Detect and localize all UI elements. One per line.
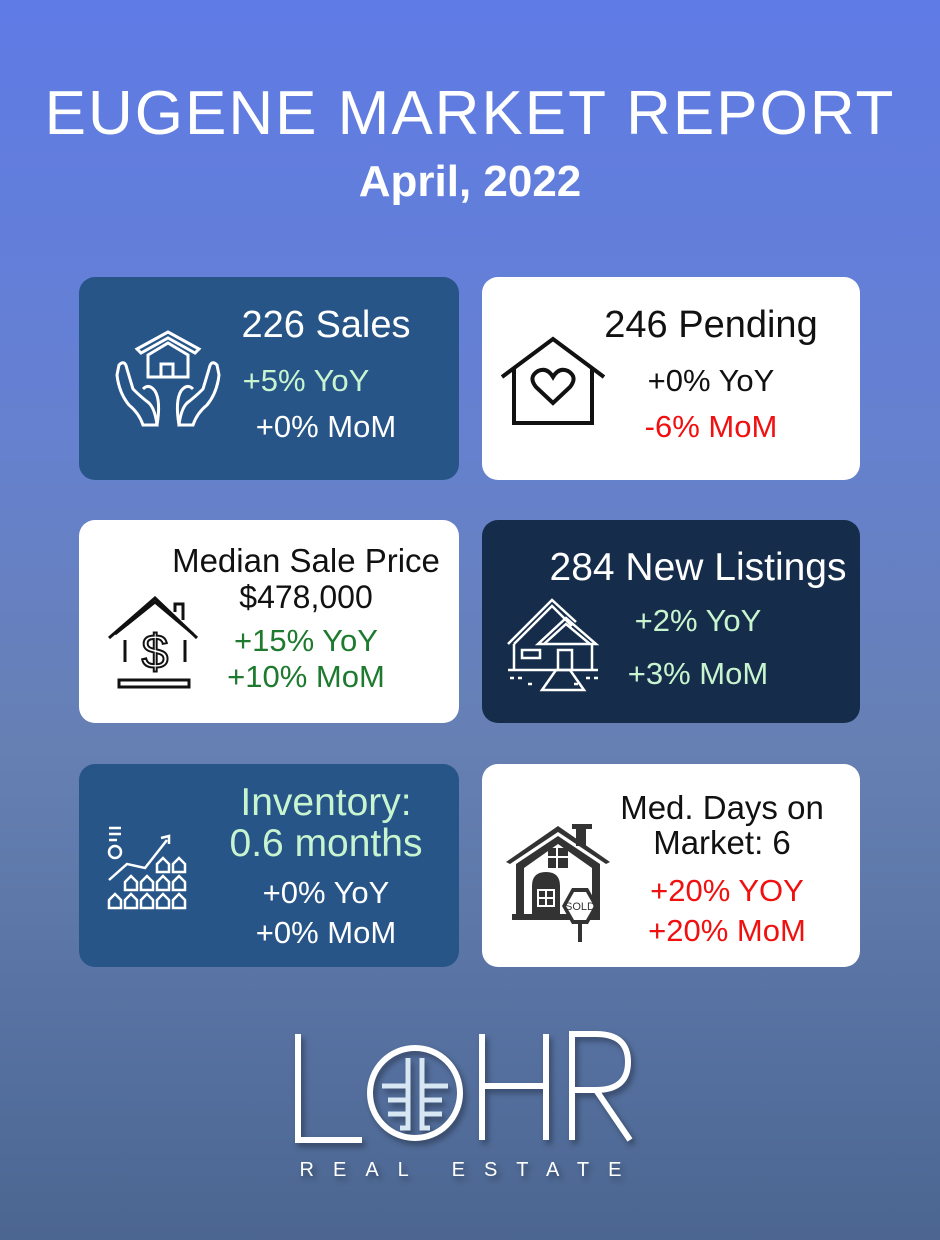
price: $478,000 xyxy=(239,579,373,615)
mom: -6% MoM xyxy=(645,409,777,444)
yoy: +0% YoY xyxy=(263,875,389,910)
heading: median sale price: Median Sale Price xyxy=(172,542,440,579)
panel: inventory xyxy=(79,764,459,967)
mom: +10% MoM xyxy=(227,659,385,694)
market value: Market: 6 xyxy=(653,824,791,861)
heading: 226 Sales: 226 Sales xyxy=(241,304,410,346)
icon: sold house: SOLD xyxy=(565,901,595,913)
mom: +3% MoM xyxy=(628,656,768,691)
yoy: +2% YoY xyxy=(635,603,761,638)
yoy: +15% YoY xyxy=(234,623,378,658)
icon: dollar house xyxy=(108,596,198,688)
heading: inventory: Inventory: xyxy=(240,781,412,824)
yoy: +5% YoY xyxy=(243,363,369,398)
yoy: +0% YoY xyxy=(648,363,774,398)
icon: dollar house: $ xyxy=(142,626,168,679)
logo: REAL ESTATE xyxy=(300,1159,640,1181)
mom: +20% MoM xyxy=(648,913,806,948)
icon: heart house xyxy=(500,336,606,425)
panel: pending xyxy=(482,277,860,480)
icon: hands house xyxy=(116,330,220,426)
heading: 284 New Listings: 284 New Listings xyxy=(550,546,846,589)
panel: new listings xyxy=(482,520,860,723)
mom: +0% MoM xyxy=(256,915,396,950)
panel: sales xyxy=(79,277,459,480)
heading: days on market: Med. Days on xyxy=(620,789,824,826)
panel: days on market xyxy=(482,764,860,967)
logo xyxy=(295,1031,640,1182)
title: EUGENE MARKET REPORT xyxy=(45,79,895,148)
yoy: +20% YOY xyxy=(650,873,804,908)
panel: median price xyxy=(79,520,459,723)
icon: growth houses xyxy=(108,826,186,910)
subtitle: April, 2022 xyxy=(359,157,581,206)
icon: sold house xyxy=(506,824,610,942)
icon: house outline xyxy=(507,598,600,692)
heading: 246 Pending: 246 Pending xyxy=(604,304,818,346)
months: 0.6 months xyxy=(230,822,422,865)
mom: +0% MoM xyxy=(256,409,396,444)
